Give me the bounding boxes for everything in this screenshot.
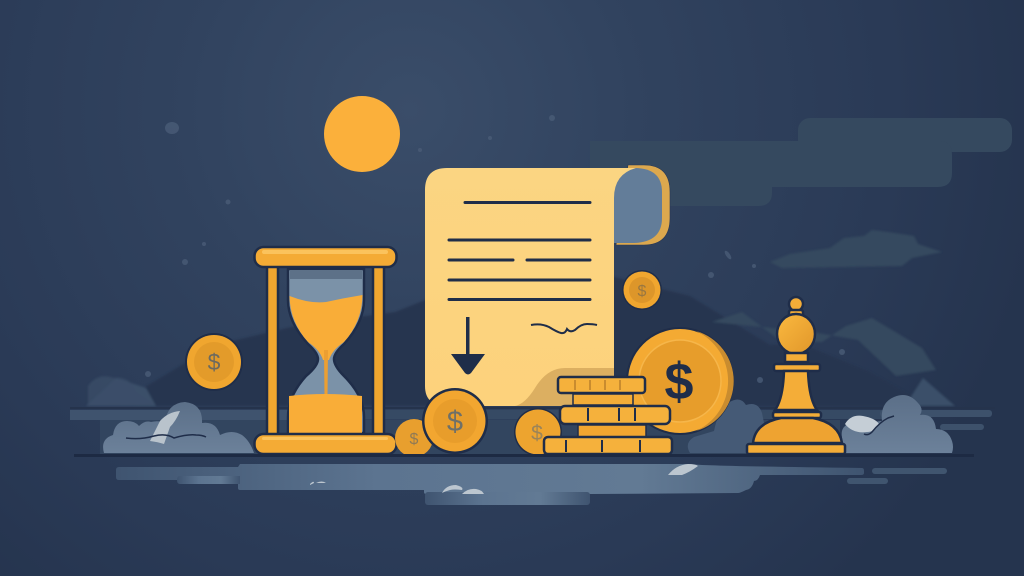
paper sheet: [425, 168, 636, 406]
coin stack: [544, 377, 672, 454]
sun: [324, 96, 400, 172]
top sand: [290, 295, 362, 360]
coin: small floating: $: [638, 283, 647, 300]
coin: beside stack: $: [531, 422, 543, 445]
left post: [267, 266, 278, 436]
falling stream: [324, 350, 328, 396]
coin: beside stack: [514, 408, 562, 456]
signature: [531, 324, 597, 333]
right cloud: [838, 395, 953, 453]
reflection strips right: [847, 468, 947, 484]
water reflections: [116, 464, 864, 505]
speckles: [145, 115, 845, 383]
bottom cap: [254, 434, 396, 454]
mountains: [86, 268, 955, 406]
hourglass glass: [288, 269, 364, 433]
coin: left floating: $: [208, 349, 221, 375]
blue cloud behind pawn: [688, 399, 768, 453]
coin: small floating: [622, 270, 662, 310]
distant clouds: [590, 118, 1012, 206]
contract lines: [449, 202, 590, 300]
bottom sand: [289, 394, 362, 433]
large coin: [626, 327, 734, 435]
ground line: [74, 454, 974, 457]
right post: [373, 266, 384, 436]
coin: small behind hourglass: [395, 419, 433, 457]
chess pawn: [747, 297, 845, 454]
coin: small behind hourglass: $: [410, 431, 419, 448]
coin: front centre: [422, 388, 488, 454]
coin: left floating: [185, 333, 243, 391]
hourglass: [254, 247, 396, 454]
down arrow: [451, 317, 485, 374]
large coin: $: [665, 353, 694, 411]
scroll curl: [616, 165, 670, 245]
left cloud: [103, 402, 254, 453]
wispy cloud: [770, 230, 942, 268]
paper contract: [425, 165, 670, 406]
ground band: [70, 407, 995, 454]
top cap: [254, 247, 396, 267]
reflection highlights: [310, 464, 698, 494]
coin: front centre: $: [447, 406, 463, 438]
